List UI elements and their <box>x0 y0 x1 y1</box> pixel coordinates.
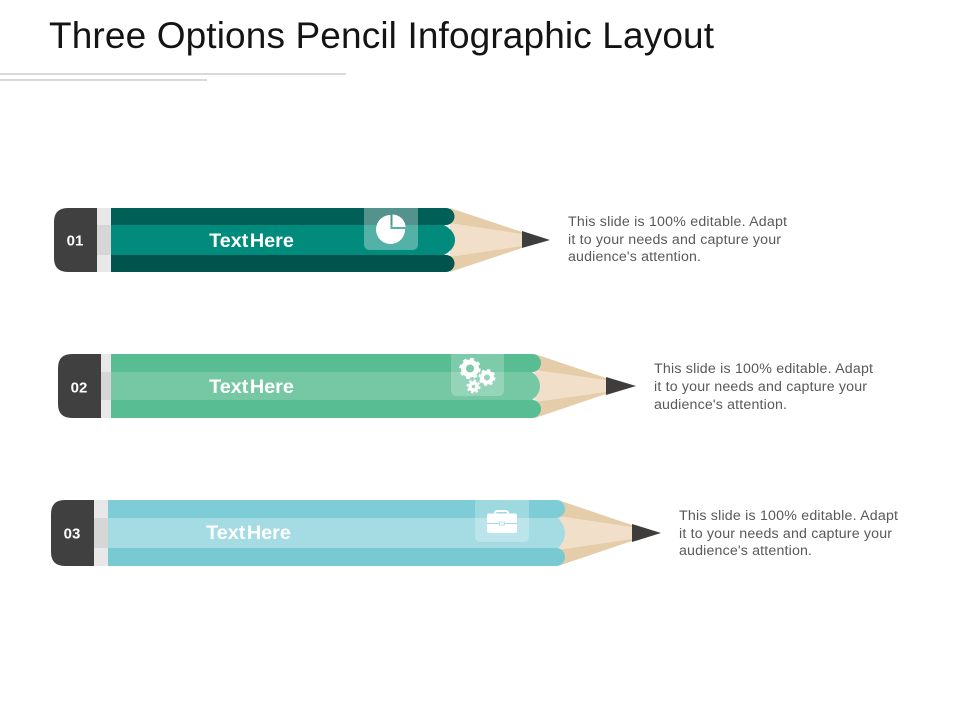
pencil 3 <box>51 500 661 566</box>
icon: pie chart <box>376 214 406 244</box>
eraser cap 1 <box>54 208 97 272</box>
description 3 <box>679 508 898 559</box>
label 3: Text Here <box>206 522 291 544</box>
label 1: Text Here <box>209 230 294 252</box>
icon tile 3 <box>475 500 529 542</box>
description 3: audience's attention. <box>679 543 812 559</box>
description 1: it to your needs and capture your <box>568 232 781 248</box>
eraser cap 3 <box>51 500 94 566</box>
wood tip 2 <box>535 354 606 418</box>
description 1: This slide is 100% editable. Adapt <box>568 214 787 230</box>
graphite point 3 <box>632 524 661 542</box>
number 02: 02 <box>71 380 87 396</box>
ferrule 2 <box>101 354 111 418</box>
ferrule 1 <box>97 208 111 272</box>
description 1: audience's attention. <box>568 249 701 265</box>
number 01: 01 <box>67 232 83 250</box>
pencil 1 <box>54 208 550 272</box>
graphite point 1 <box>522 231 550 248</box>
icon: gears <box>460 359 494 392</box>
pencil body 1 <box>111 208 455 272</box>
pencil body 2 <box>111 354 541 418</box>
description 2: This slide is 100% editable. Adapt <box>654 361 873 377</box>
graphite point 2 <box>606 377 636 395</box>
icon tile 1 <box>364 208 418 250</box>
number 03: 03 <box>64 526 80 542</box>
title: Three Options Pencil Infographic Layout <box>49 15 715 56</box>
description 1 <box>568 214 787 265</box>
wood tip 3 <box>558 500 632 566</box>
description 3: This slide is 100% editable. Adapt <box>679 508 898 524</box>
eraser cap 2 <box>58 354 101 418</box>
description 2: it to your needs and capture your <box>654 379 867 395</box>
wood tip 1 <box>450 208 522 272</box>
pencil body 3 <box>108 500 565 566</box>
description 2: audience's attention. <box>654 397 787 413</box>
ferrule 3 <box>94 500 108 566</box>
description 3: it to your needs and capture your <box>679 526 892 542</box>
pencil 2 <box>58 354 636 418</box>
description 2 <box>654 361 873 413</box>
label 2: Text Here <box>209 376 294 398</box>
icon: briefcase <box>487 511 517 533</box>
icon tile 2 <box>451 354 504 396</box>
